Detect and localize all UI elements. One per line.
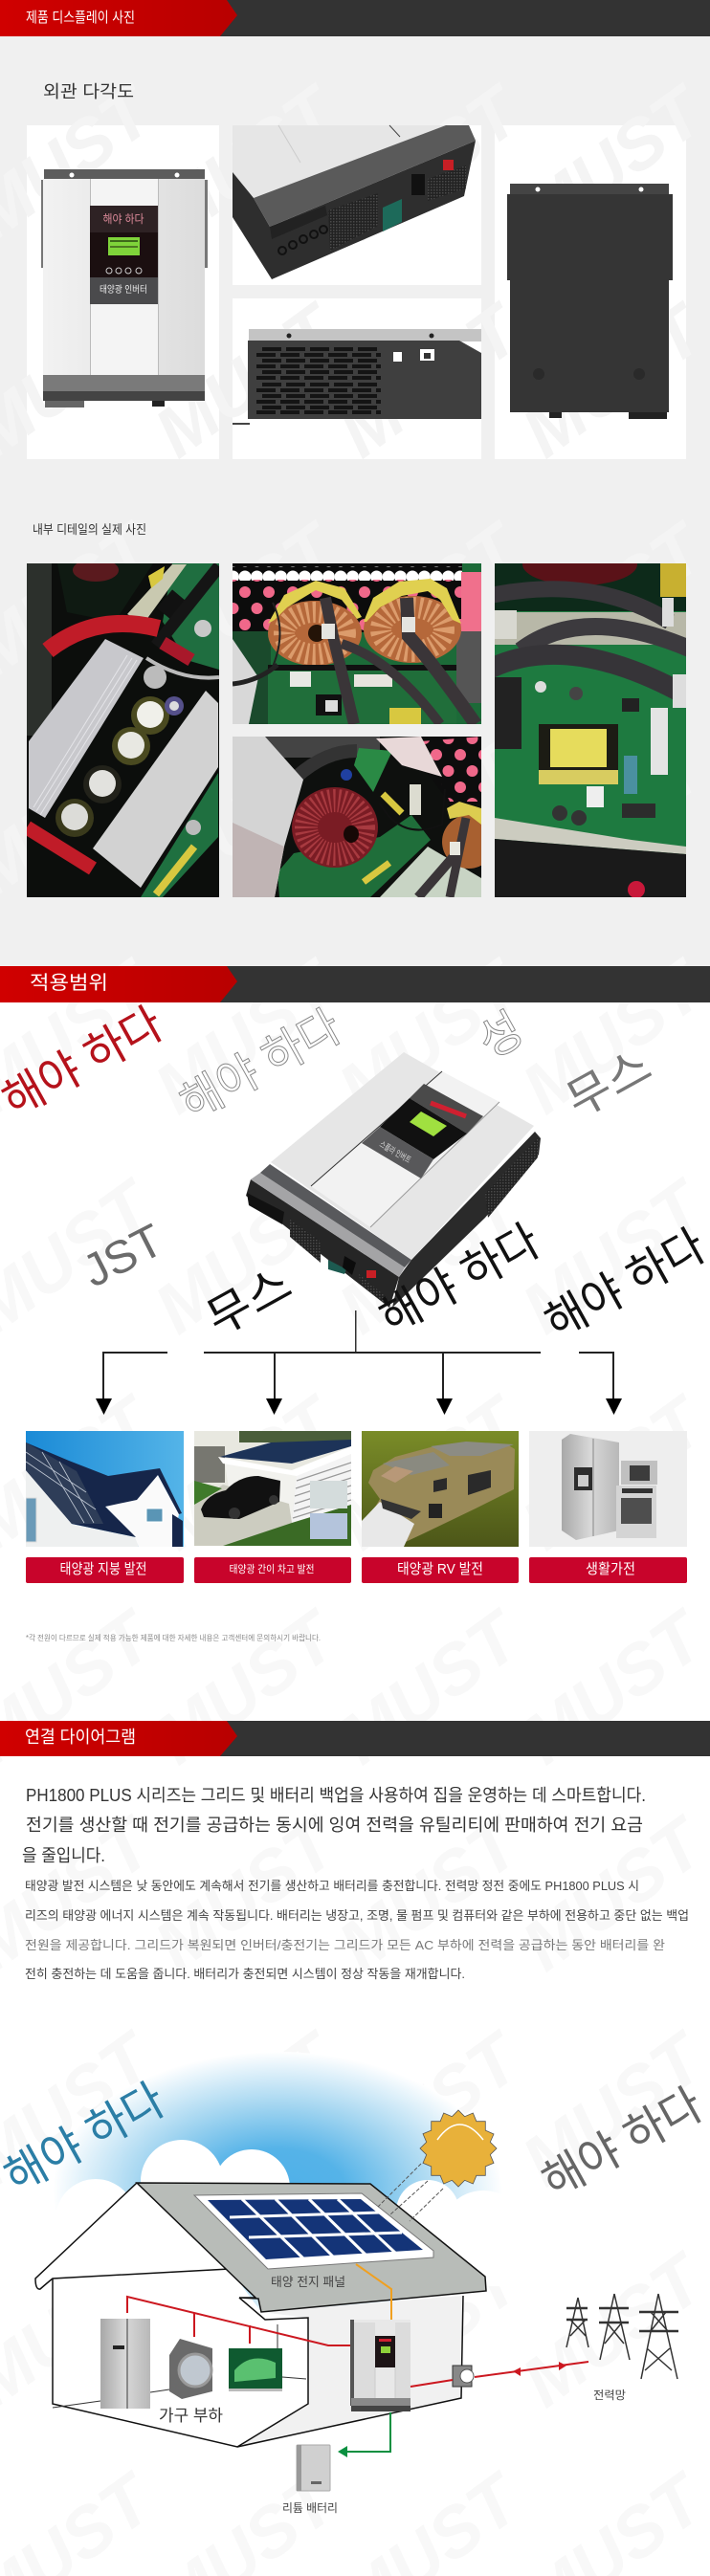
watermark: MUST logo over white sections: MUST xyxy=(141,1800,354,1986)
button: home appliances xyxy=(529,1557,687,1583)
watermark: MUST logo over white sections: MUST xyxy=(324,943,538,1129)
panel: side view card xyxy=(233,298,481,459)
button: carport solar: 태양광 간이 차고 발전 xyxy=(230,1563,314,1575)
watermark: MUST logo over white sections: MUST xyxy=(324,1800,538,1986)
overlay text: grey 무스: 무스 xyxy=(559,1041,660,1128)
product: front view inverter: 태양광 인버터 xyxy=(100,284,147,296)
image: solar carport xyxy=(194,1431,351,1546)
product: front view inverter xyxy=(41,169,208,407)
watermark: MUST logo over grey section: MUST xyxy=(324,725,538,911)
header bar: product display photos xyxy=(0,0,710,36)
watermark: MUST logo over white sections: MUST xyxy=(324,2236,538,2422)
watermark: MUST logo over white sections: MUST xyxy=(324,2015,538,2201)
text block: intro: PH1800 PLUS 시리즈는 그리드 및 배터리 백업을 사용하여 집을 운영하는 데 스마트합니다. xyxy=(26,1786,646,1805)
watermark: MUST logo over white sections: MUST xyxy=(141,1163,354,1349)
watermark: MUST logo over grey section: MUST xyxy=(324,506,538,692)
watermark: MUST logo over white sections: MUST xyxy=(141,2236,354,2422)
header bar: application scope: 적용범위 xyxy=(30,972,108,994)
watermark: MUST logo over grey section: MUST xyxy=(141,506,354,692)
heading: exterior angles: 외관 다각도 xyxy=(43,82,134,101)
watermark: MUST logo over grey section: MUST xyxy=(141,725,354,911)
button: home appliances: 생활가전 xyxy=(586,1561,635,1577)
watermark: MUST logo over white sections: MUST xyxy=(324,1379,538,1565)
background: grey section xyxy=(0,0,710,966)
product: corner view inverter xyxy=(233,125,476,279)
text block: description: 태양광 발전 시스템은 낮 동안에도 계속해서 전기를 생산하고 배터리를 충전합니다. 전력망 정전 중에도 PH1800 PLUS 시 xyxy=(25,1879,639,1893)
watermark: MUST logo over grey section xyxy=(0,0,710,911)
diagram: battery wire xyxy=(338,2412,390,2457)
photo: copper toroids xyxy=(233,563,481,724)
text block: intro: 을 줄입니다. xyxy=(22,1846,105,1865)
button: carport solar xyxy=(194,1557,351,1583)
overlay text: red 해야 하다: 해야 하다 xyxy=(0,999,171,1128)
button: rooftop solar xyxy=(26,1557,184,1583)
header bar: product display photos: 제품 디스플레이 사진 xyxy=(26,10,135,26)
watermark: MUST logo over white sections: MUST xyxy=(141,943,354,1129)
diagram: inverter xyxy=(350,2320,410,2411)
overlay text: outlined 성: 성 xyxy=(471,1003,532,1068)
icon: fridge xyxy=(100,2319,150,2409)
button: rooftop solar: 태양광 지붕 발전 xyxy=(59,1561,147,1577)
button: RV solar xyxy=(362,1557,519,1583)
panel: front view card xyxy=(27,125,219,459)
product: front view inverter: 해야 하다 xyxy=(103,212,144,226)
diagram: meter xyxy=(453,2366,474,2387)
watermark: MUST logo over white sections: MUST xyxy=(141,2015,354,2201)
product: isometric inverter xyxy=(246,1052,541,1308)
label: grid: 전력망 xyxy=(593,2389,626,2402)
diagram: load wiring xyxy=(127,2297,351,2345)
text block: description: 전히 충전하는 데 도움을 줍니다. 배터리가 충전되면 시스템이 정상 작동을 재개합니다. xyxy=(25,1967,465,1981)
connector tree with arrows xyxy=(96,1310,622,1415)
photo: transformer board xyxy=(495,563,686,897)
diagram: sun xyxy=(420,2110,497,2187)
photo: heat sinks and capacitors xyxy=(27,563,219,897)
photo: toroid and heat sink xyxy=(233,737,481,897)
watermark: MUST logo over white sections xyxy=(0,943,710,2576)
panel: back view card xyxy=(495,125,686,459)
watermark: MUST logo over grey section: MUST xyxy=(324,69,538,254)
overlay text: outlined 해야 하다: 해야 하다 xyxy=(172,1002,349,1131)
watermark: MUST logo over grey section: MUST xyxy=(141,287,354,473)
text block: intro: 전기를 생산할 때 전기를 공급하는 동시에 잉여 전력을 유틸리티에 판매하여 전기 요금 xyxy=(26,1816,643,1835)
watermark: MUST logo over grey section: MUST xyxy=(141,69,354,254)
diagram: sunlight dashes xyxy=(378,2164,443,2221)
image: home appliances xyxy=(529,1431,687,1547)
diagram: grid wiring with arrows xyxy=(410,2362,588,2387)
icon: battery xyxy=(297,2445,330,2491)
watermark: MUST logo over white sections: MUST xyxy=(324,1594,538,1779)
heading: interior detail photos: 내부 디테일의 실제 사진 xyxy=(33,522,146,537)
label: solar cell panel: 태양 전지 패널 xyxy=(271,2275,345,2289)
text block: description: 리즈의 태양광 에너지 시스템은 계속 작동됩니다. 배터리는 냉장고, 조명, 물 펌프 및 컴퓨터와 같은 부하에 전용하고 중단 없는 백업 xyxy=(25,1908,689,1923)
diagram: house xyxy=(35,2183,486,2447)
watermark: MUST logo over white sections: MUST xyxy=(141,1379,354,1565)
footnote: *각 전원이 다르므로 실제 적용 가능한 제품에 대한 자세한 내용은 고객센터에 문의하시기 바랍니다. xyxy=(26,1633,321,1642)
product: side view inverter xyxy=(233,329,481,425)
header bar: application scope xyxy=(0,966,710,1002)
panel: corner view card xyxy=(233,125,481,285)
header bar: connection diagram: 연결 다이어그램 xyxy=(25,1728,136,1747)
watermark: MUST logo over white sections: MUST xyxy=(141,1594,354,1779)
icon: tv xyxy=(229,2348,282,2391)
button: RV solar: 태양광 RV 발전 xyxy=(397,1561,483,1577)
product: back view inverter xyxy=(507,184,673,419)
label: lithium battery: 리튬 배터리 xyxy=(282,2501,338,2515)
label: household load: 가구 부하 xyxy=(159,2407,223,2425)
header bar: connection diagram xyxy=(0,1721,710,1756)
overlay text: black 해야 하다 centre: 해야 하다 xyxy=(371,1216,548,1345)
text block: intro xyxy=(22,1786,646,1865)
watermark: MUST logo over white sections: MUST xyxy=(324,1163,538,1349)
overlay text: JST: JST xyxy=(75,1215,171,1297)
watermark: MUST logo over grey section: MUST xyxy=(324,287,538,473)
overlay text: blue 해야 하다: 해야 하다 xyxy=(0,2075,173,2204)
text block: description xyxy=(25,1879,689,1981)
image: RV with solar xyxy=(362,1431,519,1547)
overlay text: black 무스: 무스 xyxy=(199,1259,300,1346)
diagram: pv wire xyxy=(356,2264,391,2322)
text block: description: 전원을 제공합니다. 그리드가 복원되면 인버터/충전기는 그리드가 모든 AC 부하에 전력을 공급하는 동안 배터리를 완 xyxy=(25,1938,665,1952)
diagram: solar panel xyxy=(194,2193,433,2269)
icon: washer xyxy=(169,2339,212,2399)
diagram: sky and clouds xyxy=(29,2052,526,2329)
product: isometric inverter: 스플라 인버트 xyxy=(378,1139,412,1165)
diagram: transmission towers xyxy=(566,2294,678,2379)
image: rooftop solar house xyxy=(26,1431,184,1547)
